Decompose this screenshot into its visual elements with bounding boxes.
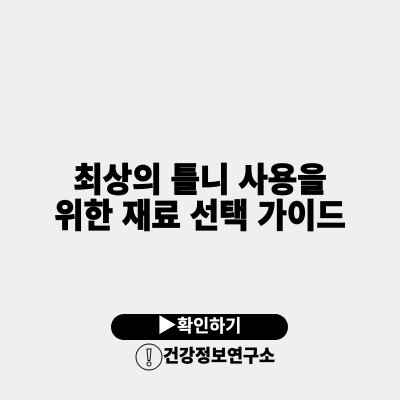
button: confirm: 확인하기 xyxy=(177,316,241,336)
title xyxy=(54,161,346,235)
title: 위한 재료 선택 가이드 xyxy=(54,197,346,235)
button: confirm xyxy=(111,314,288,340)
icon: exclamation circle xyxy=(136,344,162,370)
brand name: 건강정보연구소 xyxy=(163,346,275,366)
title: 최상의 틀니 사용을 xyxy=(73,161,327,199)
button: confirm: ▶ xyxy=(157,315,177,337)
brand logo xyxy=(136,344,275,370)
